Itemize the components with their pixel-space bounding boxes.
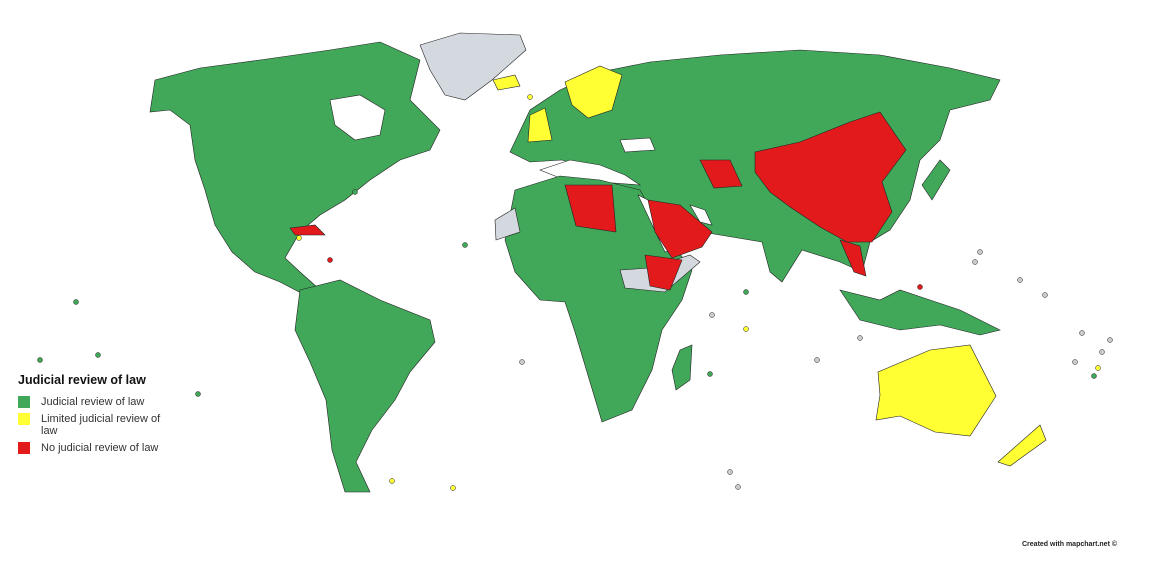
indonesia xyxy=(840,290,1000,335)
madagascar xyxy=(672,345,692,390)
mediterranean and black sea xyxy=(540,160,640,185)
uk xyxy=(528,108,552,142)
island dots xyxy=(38,94,1112,490)
legend xyxy=(18,373,160,454)
africa xyxy=(505,176,692,422)
hudson bay xyxy=(330,95,385,140)
greenland xyxy=(420,33,526,100)
legend: Judicial review of law xyxy=(18,373,146,387)
libya xyxy=(565,185,616,232)
credit: Created with mapchart.net © xyxy=(1022,541,1117,548)
legend item: limited: law xyxy=(41,425,58,437)
scandinavia xyxy=(565,66,622,118)
eurasia xyxy=(510,50,1000,282)
legend item: judicial review: Judicial review of law xyxy=(41,396,144,408)
arabia xyxy=(648,200,712,258)
north america xyxy=(150,42,440,295)
legend item: limited xyxy=(18,413,160,437)
iceland xyxy=(493,75,520,90)
new zealand xyxy=(998,425,1046,466)
red sea xyxy=(638,195,672,252)
iran xyxy=(700,160,742,188)
south america xyxy=(295,280,435,492)
legend item: limited: Limited judicial review of xyxy=(41,413,160,425)
china xyxy=(755,112,906,242)
japan xyxy=(922,160,950,200)
western sahara xyxy=(495,208,520,240)
ethiopia xyxy=(645,255,682,290)
vietnam xyxy=(840,240,866,276)
cuba xyxy=(290,225,325,235)
persian gulf xyxy=(690,205,712,225)
australia xyxy=(876,345,996,436)
legend item: none: No judicial review of law xyxy=(41,442,158,454)
somalia xyxy=(620,255,700,292)
